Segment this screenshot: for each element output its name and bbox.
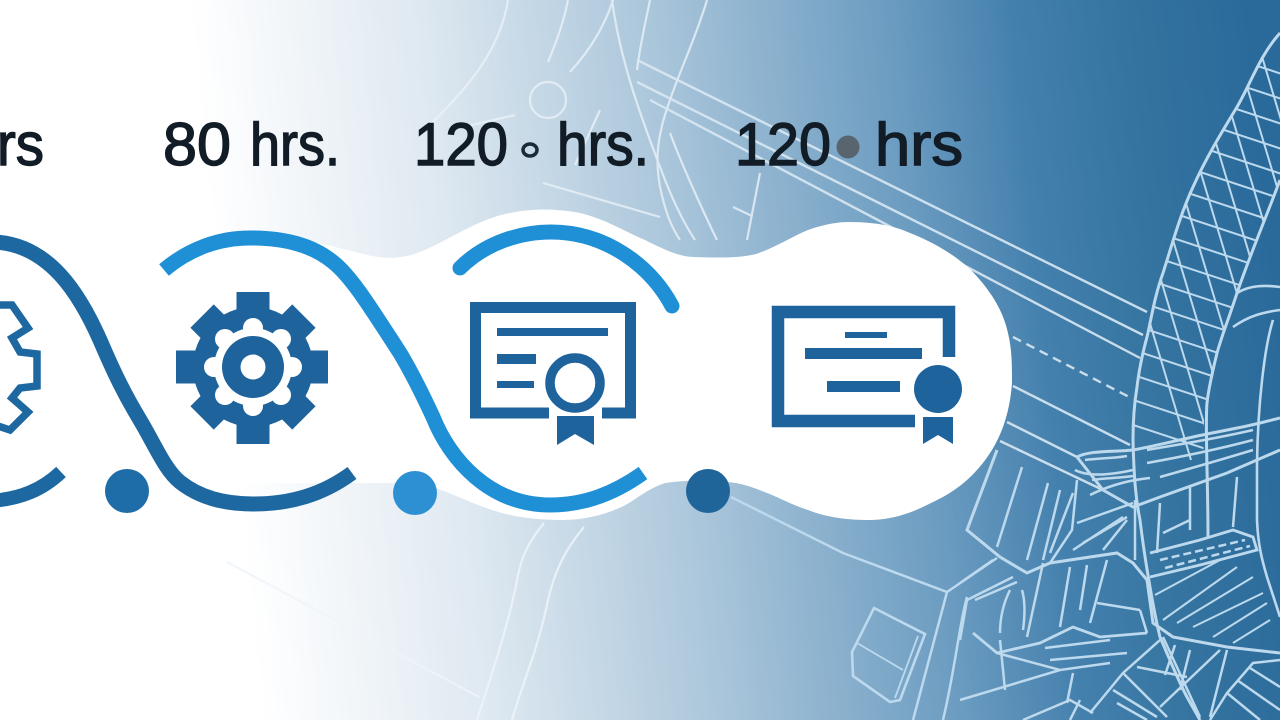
wave connector bright — [164, 238, 643, 505]
diagonal fan — [1155, 560, 1270, 643]
label: 120 second: 120 — [735, 111, 831, 178]
crosshatched wheel band — [1134, 58, 1280, 460]
bottom clusters — [1023, 660, 1280, 720]
label: 80: 80 — [163, 111, 231, 178]
quadrilateral frame — [967, 450, 1280, 653]
white band behind icons — [0, 210, 1012, 520]
wheel arcs — [1133, 33, 1280, 720]
cube part — [852, 608, 925, 702]
label: grey dot — [836, 136, 860, 158]
blueprint lines: converging rails — [637, 60, 1147, 490]
timeline dots — [105, 469, 730, 515]
icon: partial gear — [0, 305, 37, 430]
icon: gear — [176, 292, 328, 444]
junction lines — [1067, 637, 1227, 717]
icon: certificate with rosette — [476, 308, 630, 445]
label: hrs.: hrs. — [250, 111, 340, 178]
dot two — [393, 471, 437, 515]
dot three — [686, 469, 730, 513]
label: 120 first: 120 — [414, 111, 508, 178]
wavy bands — [1077, 418, 1280, 457]
wave arc bottom left — [0, 472, 61, 501]
blueprint line art: upper centre — [430, 0, 760, 240]
lower woven band — [1150, 530, 1257, 577]
mid mesh — [960, 560, 1107, 640]
dot one — [105, 469, 149, 513]
blueprint machine wireframe — [731, 14, 1280, 720]
blueprint lines: lower left — [227, 523, 584, 720]
lower frame lines — [731, 497, 997, 720]
wave connector dark — [0, 242, 352, 504]
label: hrs third: hrs — [875, 111, 963, 178]
hours labels — [0, 111, 963, 178]
icon: certificate with seal — [778, 312, 962, 444]
verticals under wheel — [1135, 477, 1237, 560]
wave arc bright top — [460, 232, 672, 306]
label: small dot first — [523, 144, 537, 156]
label: hrs. second: hrs. — [557, 111, 649, 178]
